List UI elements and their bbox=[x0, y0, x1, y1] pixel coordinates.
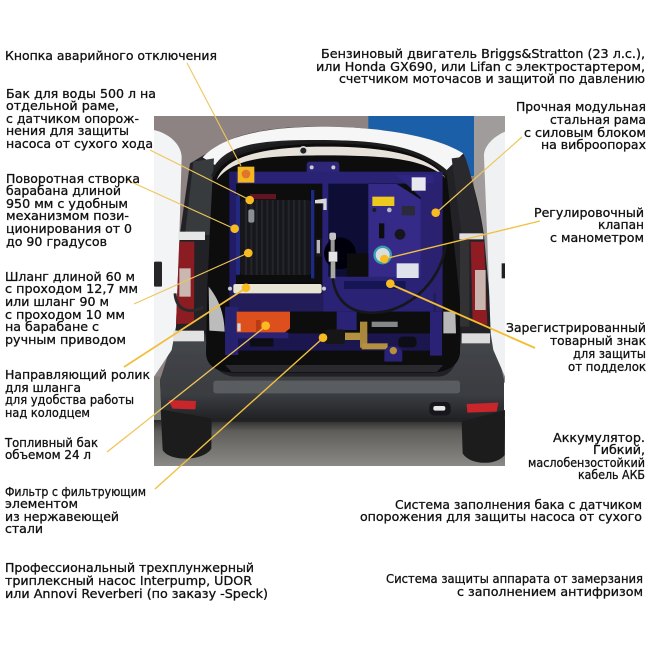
label: engine: счетчиком моточасов и защитой по давлению bbox=[339, 72, 645, 86]
wheels bbox=[161, 409, 505, 463]
headliner bbox=[217, 147, 446, 180]
label: filter: Фильтр с фильтрующим bbox=[5, 485, 146, 499]
label: rotating drum door: барабана длиной bbox=[6, 184, 121, 198]
guide roller bbox=[228, 284, 326, 293]
label: trademark bbox=[506, 321, 646, 374]
label: rotating drum door: механизмом пози- bbox=[6, 209, 129, 223]
label: water tank: нения для защиты bbox=[6, 124, 129, 138]
pressure gauge bbox=[373, 246, 392, 264]
label: filter: стали bbox=[5, 522, 43, 536]
reflectors and tow hook bbox=[168, 400, 498, 415]
label: antifreeze system: с заполнением антифризом bbox=[457, 585, 643, 599]
label: battery and cable: кабель АКБ bbox=[578, 468, 645, 482]
label: battery and cable: Аккумулятор. bbox=[553, 431, 645, 445]
label: regulator valve: клапан bbox=[598, 218, 644, 232]
label: pump: триплексный насос Interpump, UDOR bbox=[5, 574, 252, 588]
right door bbox=[484, 132, 505, 377]
right tail light bbox=[459, 233, 490, 343]
line: regulator valve bbox=[380, 221, 540, 263]
label: trademark: товарный знак bbox=[550, 334, 646, 348]
line: drum door bbox=[127, 180, 239, 233]
label: emergency stop: Кнопка аварийного отключения bbox=[5, 49, 217, 63]
label: rotating drum door: Поворотная створка bbox=[6, 172, 140, 186]
label: water tank: насоса от сухого хода bbox=[6, 137, 153, 151]
label: engine bbox=[316, 47, 645, 86]
blue frame bbox=[225, 162, 443, 356]
label: trademark: от подделок bbox=[568, 360, 646, 374]
label: steel frame: на виброопорах bbox=[541, 138, 646, 152]
label: hose: на барабане с bbox=[5, 320, 99, 334]
label: engine: Бензиновый двигатель Briggs&Stratton (23 л.с.), bbox=[321, 47, 645, 61]
label: hose: с проходом 10 мм bbox=[5, 308, 125, 322]
label: hose: Шланг длиной 60 м bbox=[5, 270, 135, 284]
label: filter: элементом bbox=[5, 497, 78, 511]
label: fuel tank bbox=[4, 436, 98, 462]
label: battery and cable bbox=[528, 431, 645, 482]
label: trademark: Зарегистрированный bbox=[506, 321, 646, 335]
label: filter bbox=[5, 485, 146, 536]
label: battery and cable: Гибкий, bbox=[593, 443, 645, 457]
label: guide roller: для удобства работы bbox=[5, 393, 134, 407]
label: tank filling system: Система заполнения бака с датчиком bbox=[395, 498, 642, 512]
label: steel frame bbox=[516, 100, 646, 152]
label: engine: или Honda GX690, или Lifan с электростартером, bbox=[316, 60, 645, 74]
label: rotating drum door: 950 мм с удобным bbox=[6, 197, 128, 211]
label: fuel tank: Топливный бак bbox=[4, 436, 98, 450]
cargo opening bbox=[206, 142, 461, 373]
line: hose bbox=[134, 249, 253, 304]
left door bbox=[154, 130, 182, 377]
label: regulator valve bbox=[534, 206, 644, 245]
label: water tank: отдельной раме, bbox=[6, 99, 119, 113]
label: guide roller: для шланга bbox=[5, 381, 81, 395]
label: rotating drum door bbox=[6, 172, 140, 249]
line: guide roller bbox=[124, 283, 250, 367]
label: hose: ручным приводом bbox=[5, 333, 126, 347]
line: trademark bbox=[386, 279, 535, 348]
callout lines and markers bbox=[107, 63, 540, 489]
label: antifreeze system bbox=[386, 572, 643, 599]
emergency stop button bbox=[238, 167, 254, 183]
label: guide roller bbox=[5, 368, 150, 420]
label: tank filling system: опорожения для защиты насоса от сухого bbox=[360, 510, 642, 524]
line: fuel tank bbox=[107, 321, 270, 452]
label: trademark: для защиты bbox=[573, 347, 646, 361]
high pressure hose bbox=[333, 243, 446, 313]
label: pump bbox=[5, 561, 268, 601]
label: water tank bbox=[6, 87, 156, 151]
line: emergency button bbox=[187, 63, 241, 166]
hose reel bbox=[236, 190, 327, 278]
control panel bbox=[372, 177, 426, 278]
label: pump: или Annovi Reverberi (по заказу -Speck) bbox=[5, 587, 268, 601]
brand logo on frame bbox=[344, 281, 406, 289]
pressure valve bbox=[329, 233, 337, 278]
photo: van rear with installed unit bbox=[154, 116, 505, 466]
brass pipework and filter bbox=[325, 322, 402, 362]
background wall and ground bbox=[154, 116, 505, 466]
label: water tank: с датчиком опорож- bbox=[6, 112, 139, 126]
engine bbox=[316, 237, 368, 277]
label: regulator valve: Регулировочный bbox=[534, 206, 644, 220]
label: tank filling system bbox=[360, 498, 642, 524]
label: guide roller: Направляющий ролик bbox=[5, 368, 150, 382]
label: steel frame: Прочная модульная bbox=[516, 100, 646, 114]
label: fuel tank: объемом 24 л bbox=[5, 448, 91, 462]
line: steel frame bbox=[431, 137, 522, 217]
label: steel frame: с силовым блоком bbox=[524, 126, 646, 140]
line: filter bbox=[155, 333, 327, 489]
line: water tank bbox=[150, 150, 254, 204]
label: water tank: Бак для воды 500 л на bbox=[6, 87, 156, 101]
left tail light bbox=[173, 232, 205, 341]
label: antifreeze system: Система защиты аппарата от замерзания bbox=[386, 572, 643, 586]
label: guide roller: над колодцем bbox=[5, 406, 90, 420]
label: rotating drum door: до 90 градусов bbox=[6, 235, 107, 249]
label: pump: Профессиональный трехплунжерный bbox=[5, 561, 254, 575]
label: filter: из нержавеющей bbox=[5, 510, 119, 524]
label: rotating drum door: ционирования от 0 bbox=[6, 222, 132, 236]
fuel tank bbox=[237, 312, 290, 332]
label: hose: или шланг 90 м bbox=[5, 295, 109, 309]
label: hose: с проходом 12,7 мм bbox=[5, 282, 138, 296]
label: regulator valve: с манометром bbox=[550, 231, 644, 245]
label: steel frame: стальная рама bbox=[550, 113, 646, 127]
van body bbox=[160, 127, 504, 422]
label: hose bbox=[5, 270, 138, 347]
